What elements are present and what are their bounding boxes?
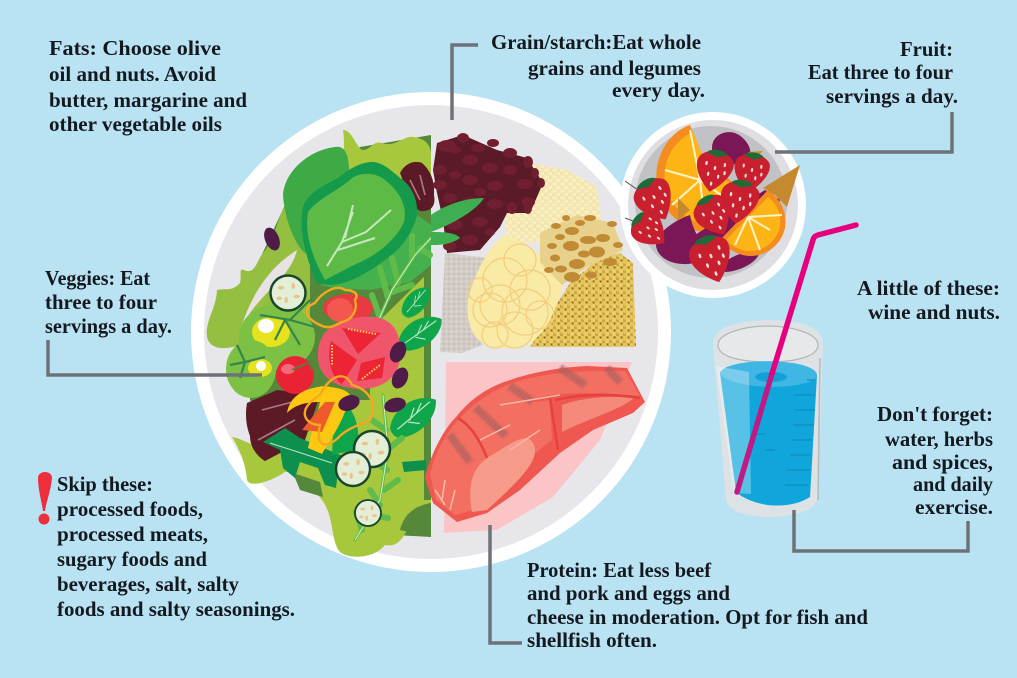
dark arugula [263, 428, 370, 488]
panel: fruit bowl [620, 112, 806, 298]
text: don't forget: water, herbs [885, 427, 993, 451]
text: a little of these: wine and nuts. [868, 300, 1000, 324]
reflection [716, 366, 751, 494]
green tomatoes [226, 300, 315, 398]
text: a little of these: A little of these: [857, 276, 1000, 300]
lentils [540, 215, 623, 285]
text: a little of these [857, 276, 1000, 324]
text: grain [491, 30, 705, 102]
text: skip these: sugary foods and [57, 547, 207, 571]
tan wedges [678, 151, 800, 220]
small red tomato [276, 356, 314, 394]
text: don't forget: Don't forget: [877, 402, 993, 426]
text: skip these: beverages, salt, salty [57, 572, 239, 596]
gold grain [530, 253, 636, 347]
text: don't forget [877, 402, 993, 519]
ridge lines [458, 395, 640, 458]
yellow pepper strips [287, 386, 350, 454]
text: fruit: Eat three to four [808, 60, 953, 84]
text: fats: Fats: Choose olive [49, 36, 221, 60]
arugula over beans [431, 198, 484, 245]
purple fruit pieces [656, 132, 780, 272]
text: veggies: servings a day. [45, 314, 172, 338]
icon: exclamation mark [38, 472, 52, 524]
dark red lettuce [246, 162, 434, 461]
text: fats [49, 36, 247, 136]
small orange half [720, 190, 786, 256]
text: don't forget: and spices, [892, 450, 993, 474]
panel: protein salmon [425, 362, 645, 533]
glass body [713, 320, 823, 517]
text: fruit [808, 37, 958, 108]
panel: water glass [713, 225, 856, 517]
noodles [468, 235, 563, 348]
text: fruit: servings a day. [826, 84, 958, 108]
text: don't forget: and daily [913, 472, 993, 496]
light lettuce [207, 130, 431, 557]
text: protein: Protein: Eat less beef [527, 558, 712, 582]
text: skip these: processed meats, [57, 522, 208, 546]
text: veggies: Veggies: Eat [45, 266, 150, 290]
dark green underlay [250, 135, 431, 537]
spinach leaves [395, 283, 438, 320]
cream grain [505, 163, 601, 245]
text: protein: shellfish often. [527, 628, 657, 652]
sliced tomato [323, 294, 373, 322]
orange slice large [656, 125, 740, 233]
text: grain: grains and legumes [528, 56, 701, 80]
text: protein: and pork and eggs and [527, 581, 730, 605]
strawberries [692, 147, 736, 195]
white onion strip [240, 250, 297, 330]
water [720, 366, 817, 506]
pink square [444, 362, 632, 533]
straw [771, 225, 856, 377]
text: skip these: foods and salty seasonings. [57, 597, 295, 621]
main plate [191, 92, 671, 572]
orange pepper rings [305, 288, 373, 444]
kidney beans [431, 133, 545, 253]
text: veggies [45, 266, 172, 338]
text: fats: oil and nuts. Avoid [49, 62, 216, 86]
text: skip these: processed foods, [57, 497, 203, 521]
text: fats: other vegetable oils [49, 112, 222, 136]
cucumber slices [270, 276, 306, 310]
beige grain [440, 253, 490, 353]
large tomato [318, 317, 400, 389]
back leaf [283, 147, 349, 255]
text: fats: butter, margarine and [49, 88, 247, 112]
salmon fillet [425, 366, 645, 522]
big lettuce leaf [302, 162, 417, 285]
text: grain: every day. [612, 78, 705, 102]
text: don't forget: exercise. [915, 495, 993, 519]
arugula sprig [372, 236, 431, 335]
grill marks [450, 368, 620, 462]
rosemary sprig [355, 395, 402, 540]
text: skip these [57, 472, 295, 621]
text: protein [527, 558, 868, 652]
panel: salad vegetables [207, 130, 448, 557]
leader lines [48, 45, 968, 643]
text: grain: Grain/starch:Eat whole [491, 30, 701, 54]
olives [261, 225, 411, 415]
text: fruit: Fruit: [900, 37, 953, 61]
text: veggies: three to four [45, 290, 157, 314]
text: skip these: Skip these: [57, 472, 153, 496]
text: protein: cheese in moderation. Opt for fish and [527, 605, 868, 629]
dark green notches [293, 250, 431, 537]
green lobe under big leaf [320, 215, 431, 290]
